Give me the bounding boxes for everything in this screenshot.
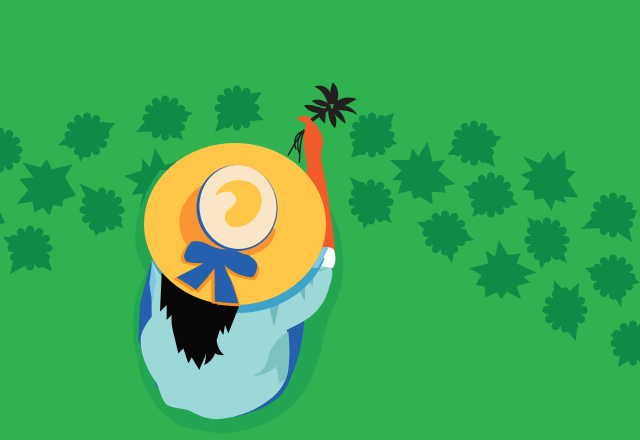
crown swirl: [215, 180, 262, 227]
seedling 11: [447, 124, 502, 167]
seedling 15: [417, 214, 474, 263]
sleeve crease 2: [297, 282, 305, 302]
seedling 4: [0, 132, 22, 168]
crown: [195, 161, 281, 253]
left shoulder highlight: [149, 260, 156, 303]
crown shadow: [179, 183, 276, 259]
light cuff shadow: [312, 247, 329, 268]
ribbon shadow right: [179, 244, 259, 306]
seedling 6: [3, 230, 52, 274]
seedling 5: [79, 183, 123, 236]
seedling 16: [527, 217, 567, 269]
sun hat: [144, 143, 326, 306]
blue garment layer: [138, 260, 304, 417]
palm fronds: [304, 82, 357, 128]
seedling 3: [215, 90, 264, 132]
seedling 13: [463, 176, 518, 217]
sleeve crease 1: [268, 300, 280, 327]
seedling 2: [136, 100, 193, 140]
seedlings: right group: [350, 113, 640, 367]
star seedling 14: [521, 150, 578, 211]
woman's ground shadow: [133, 170, 343, 433]
hair: [160, 273, 239, 370]
held seedling: [288, 82, 357, 162]
seedling edge fragment: [0, 212, 5, 224]
body: [138, 247, 332, 419]
seedlings: left group: [0, 90, 264, 274]
shoulder shade: [310, 267, 330, 272]
illustration: woman in sun hat planting seedlings in a field: [0, 82, 640, 433]
seedling 19: [585, 258, 640, 307]
seedling 18: [581, 196, 638, 242]
hat cast shadow on shirt: [152, 253, 324, 313]
ribbon shadow left: [173, 243, 254, 305]
sleeve fold: [252, 332, 289, 383]
seedling 1: [58, 116, 115, 162]
star seedling 7: [17, 159, 76, 216]
star seedling 17: [469, 240, 537, 299]
seedling 21: [610, 324, 640, 367]
seedling 20: [546, 280, 584, 341]
star seedling 8: [124, 148, 180, 213]
orange arm and hand: [297, 116, 335, 252]
white cuff: [315, 247, 335, 268]
hat brim: [144, 143, 326, 305]
seedling 12: [350, 177, 392, 229]
roots: [288, 130, 304, 162]
sleeve crease 3: [305, 275, 313, 287]
crown band: [192, 161, 282, 255]
star seedling 10: [390, 142, 455, 204]
blue ribbon bow: [177, 241, 257, 303]
seedling 9: [351, 113, 397, 158]
pale blue shirt: [141, 247, 332, 419]
